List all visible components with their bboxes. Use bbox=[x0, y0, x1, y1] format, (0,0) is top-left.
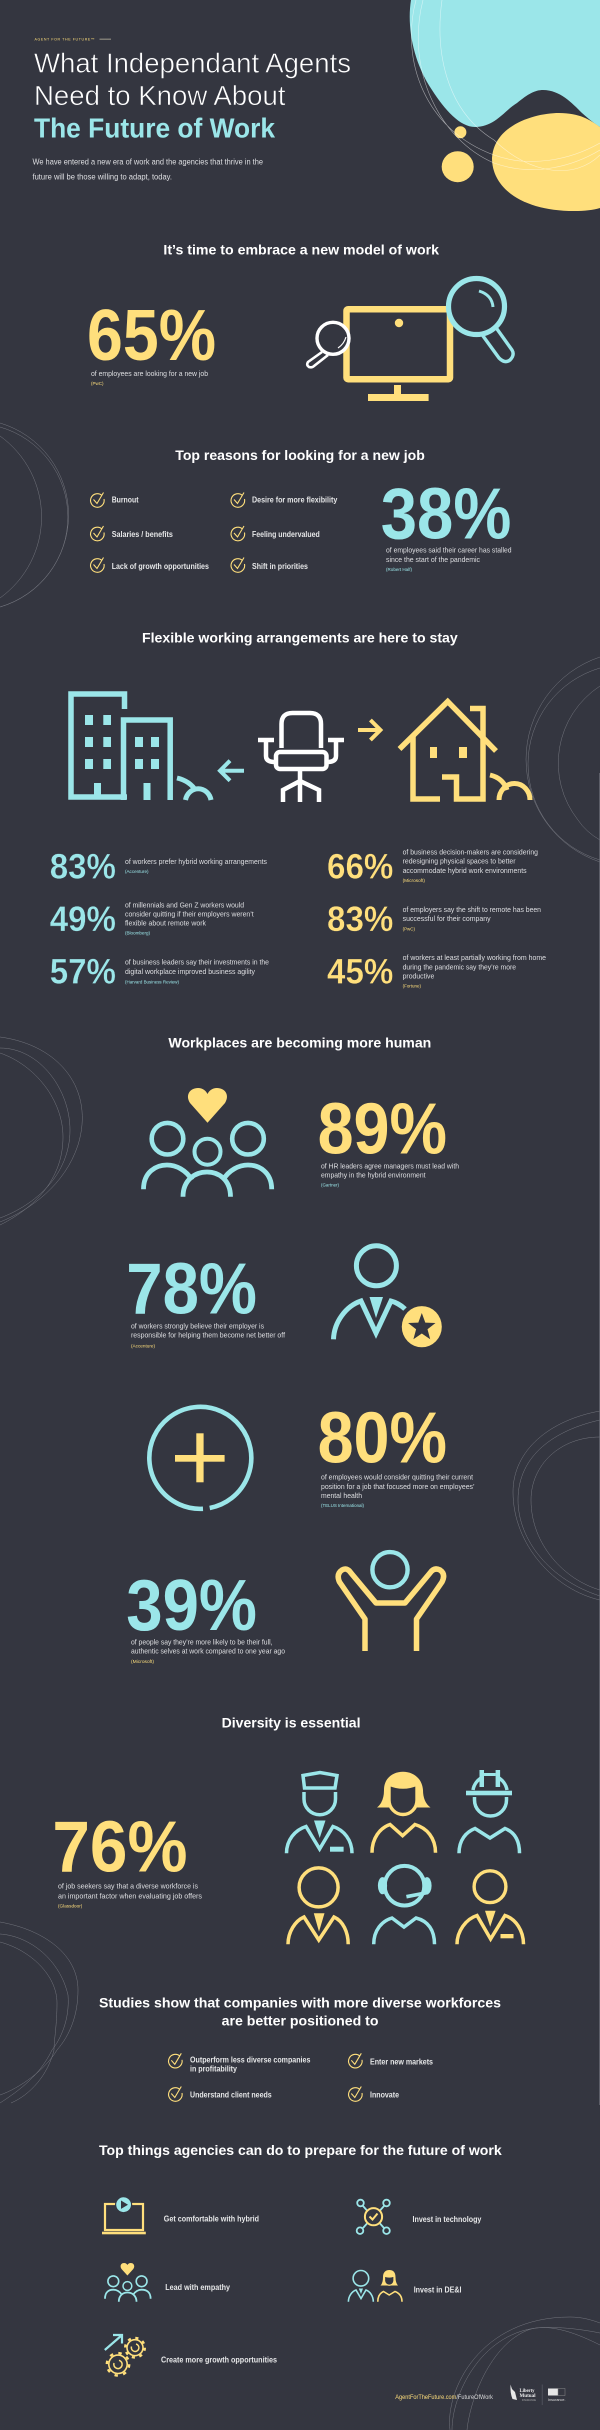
stat: 78%: 78% bbox=[126, 1249, 257, 1329]
stat: 89%: 89% bbox=[318, 1089, 447, 1169]
stat: 78%: responsible for helping them become net better off bbox=[131, 1331, 286, 1340]
decorative blobs bbox=[410, 0, 600, 211]
logo: Liberty Mutual: Mutual bbox=[520, 2394, 536, 2399]
stat: 49%: of millennials and Gen Z workers would bbox=[125, 900, 244, 909]
stat: 38%: since the start of the pandemic bbox=[386, 555, 480, 564]
stat: 45% bbox=[327, 952, 546, 991]
stat: 83% employers: successful for their company bbox=[403, 914, 491, 923]
checklist: diverse companies bbox=[169, 2053, 434, 2101]
reason: burnout bbox=[91, 492, 139, 507]
icon: monitor with magnifiers bbox=[307, 278, 513, 401]
reason: growth: Lack of growth opportunities bbox=[112, 562, 209, 571]
large magnifier bbox=[448, 278, 513, 362]
stats: hybrid work, right column bbox=[327, 847, 546, 991]
reason: undervalued bbox=[231, 526, 320, 541]
icon: headset agent bbox=[374, 1866, 434, 1944]
stat: 80%: 80% bbox=[318, 1399, 447, 1479]
icon: office buildings bbox=[71, 694, 211, 800]
stat: 83%: 83% bbox=[50, 847, 116, 886]
heading: diversity: Diversity is essential bbox=[222, 1715, 360, 1731]
stat: 39%: (Microsoft) bbox=[131, 1659, 154, 1664]
stat: 49%: consider quitting if their employers weren’t bbox=[125, 910, 254, 919]
icon: construction worker bbox=[459, 1770, 520, 1853]
stat: 38%: of employees said their career has stalled bbox=[386, 546, 512, 555]
action: hybrid bbox=[102, 2196, 259, 2234]
stat: 89%: (Gartner) bbox=[321, 1183, 339, 1188]
heading: new model of work: It’s time to embrace a new model of work bbox=[163, 242, 439, 258]
stat: 83% employers: 83% bbox=[327, 900, 393, 939]
reason: burnout: Burnout bbox=[112, 496, 139, 505]
monitor bbox=[346, 309, 450, 401]
stat: 76%: an important factor when evaluating job offers bbox=[58, 1891, 202, 1900]
stat: 65%: of employees are looking for a new job bbox=[91, 369, 208, 378]
action: empathy: Lead with empathy bbox=[165, 2283, 231, 2292]
stat: 83% employers bbox=[327, 900, 541, 939]
icon: woman bbox=[372, 1772, 436, 1853]
logo: Liberty Mutual: Liberty bbox=[520, 2389, 535, 2394]
stat: 76%: (Glassdoor) bbox=[58, 1904, 83, 1909]
stat: 49%: 49% bbox=[50, 900, 116, 939]
reason: growth bbox=[91, 558, 209, 572]
stat: 66%: of business decision-makers are considering bbox=[403, 848, 538, 857]
action: technology: Invest in technology bbox=[412, 2215, 482, 2224]
action: technology bbox=[357, 2200, 482, 2234]
stat: 45%: during the pandemic say they’re more bbox=[403, 962, 516, 971]
header bbox=[32, 37, 351, 181]
stat: 83% employers: (PwC) bbox=[403, 927, 415, 932]
stat: 89%: empathy in the hybrid environment bbox=[321, 1170, 426, 1179]
stats: hybrid work, left column bbox=[50, 847, 269, 991]
stat: 83%: (Accenture) bbox=[125, 869, 149, 874]
intro paragraph bbox=[32, 158, 263, 181]
icon: plus in circle bbox=[149, 1407, 251, 1509]
icon: team with heart small bbox=[105, 2263, 151, 2302]
title bbox=[34, 48, 351, 144]
icon: team with heart bbox=[144, 1088, 272, 1197]
title: What Independant Agents bbox=[34, 48, 351, 79]
stat: 57%: (Harvard Business Review) bbox=[125, 979, 179, 984]
reason: priorities: Shift in priorities bbox=[252, 562, 308, 571]
stat: 65%: (PwC) bbox=[91, 381, 104, 386]
icon: manager bbox=[457, 1871, 524, 1944]
icon: person with star bbox=[334, 1246, 442, 1347]
item: new markets: Enter new markets bbox=[370, 2058, 434, 2067]
stat: 38%: 38% bbox=[381, 474, 511, 554]
stat: 80%: (TELUS International) bbox=[321, 1503, 364, 1508]
stat: 66%: 66% bbox=[327, 847, 393, 886]
stat: 66%: (Microsoft) bbox=[403, 878, 425, 883]
icon: house bbox=[400, 702, 530, 800]
icon: office chair bbox=[258, 713, 344, 802]
heading: top things: Top things agencies can do to prepare for the future of work bbox=[99, 2142, 502, 2158]
icon: arrow and gears bbox=[105, 2335, 145, 2376]
icon: officer bbox=[286, 1772, 352, 1853]
item: outperform: Outperform less diverse companies bbox=[190, 2056, 311, 2065]
action: DE&I: Invest in DE&I bbox=[414, 2286, 462, 2295]
reason: salaries: Salaries / benefits bbox=[112, 530, 174, 539]
stat: 66%: redesigning physical spaces to better bbox=[403, 857, 516, 866]
item: innovate: Innovate bbox=[370, 2090, 400, 2099]
stat: 66%: accommodate hybrid work environments bbox=[403, 866, 527, 875]
stat: 49%: (Bloomberg) bbox=[125, 931, 150, 936]
stat: 76%: of job seekers say that a diverse workforce is bbox=[58, 1882, 198, 1891]
item: outperform bbox=[169, 2053, 311, 2074]
stat: 65%: 65% bbox=[87, 296, 216, 376]
stat: 39%: authentic selves at work compared to one year ago bbox=[131, 1647, 285, 1656]
stat: 80% bbox=[318, 1399, 475, 1508]
title: The Future of Work bbox=[34, 113, 275, 144]
small magnifier bbox=[307, 322, 349, 367]
reason: salaries bbox=[91, 526, 174, 541]
footer url: AgentForTheFuture.com/FutureOfWork bbox=[395, 2394, 494, 2401]
checklist: reasons bbox=[91, 492, 338, 572]
stat: 83% employers: of employers say the shift to remote has been bbox=[403, 905, 541, 914]
stat: 45%: 45% bbox=[327, 952, 393, 991]
intro paragraph: future will be those willing to adapt, today. bbox=[32, 172, 172, 181]
stat: 66% bbox=[327, 847, 538, 886]
action: growth: Create more growth opportunities bbox=[161, 2355, 278, 2364]
stat: 45%: (Fortune) bbox=[403, 984, 421, 989]
stat: 45%: of workers at least partially working from home bbox=[403, 953, 546, 962]
icon: laptop with play bbox=[102, 2196, 146, 2234]
action: empathy bbox=[105, 2263, 231, 2302]
stat: 83% bbox=[50, 847, 267, 886]
item: outperform: in profitability bbox=[190, 2065, 238, 2074]
stat: 39%: of people say they’re more likely to be their full, bbox=[131, 1638, 272, 1647]
icon: network bbox=[357, 2200, 390, 2234]
logo: Liberty Mutual: INSURANCE bbox=[522, 2399, 536, 2402]
heading: more human: Workplaces are becoming more human bbox=[168, 1034, 431, 1050]
arrow: to home bbox=[358, 720, 380, 740]
stat: 76%: 76% bbox=[52, 1808, 188, 1888]
stat: 49% bbox=[50, 900, 254, 939]
heading: flexible working: Flexible working arrangements are here to stay bbox=[142, 629, 458, 645]
intro paragraph: We have entered a new era of work and the agencies that thrive in the bbox=[32, 158, 263, 167]
reason: priorities bbox=[231, 558, 308, 572]
stat: 38%: (Robert Half) bbox=[386, 567, 412, 572]
heading: studies show: are better positioned to bbox=[222, 2012, 378, 2028]
item: new markets bbox=[349, 2053, 434, 2068]
action: hybrid: Get comfortable with hybrid bbox=[164, 2215, 259, 2224]
eyebrow label: AGENT FOR THE FUTURE™ bbox=[34, 37, 94, 41]
heading: top reasons: Top reasons for looking for a new job bbox=[175, 447, 425, 463]
stat: 80%: of employees would consider quitting their current bbox=[321, 1473, 473, 1482]
logos bbox=[510, 2384, 566, 2405]
illustration: office, chair, home bbox=[71, 694, 530, 802]
stat: 83%: of workers prefer hybrid working arrangements bbox=[125, 857, 267, 866]
heading: studies show: Studies show that companies with more diverse workforces bbox=[99, 1995, 501, 2011]
title: Need to Know About bbox=[34, 80, 286, 111]
action: DE&I bbox=[348, 2270, 462, 2302]
logo: Liberty Mutual bbox=[510, 2384, 536, 2402]
icons: diverse workforce bbox=[286, 1770, 524, 1944]
stat: 89%: of HR leaders agree managers must lead with bbox=[321, 1161, 459, 1170]
stat: 49%: flexible about remote work bbox=[125, 919, 206, 928]
icon: businessman bbox=[288, 1868, 348, 1944]
logo: Safeco: Insurance. bbox=[548, 2397, 566, 2402]
reason: flexibility bbox=[231, 492, 338, 507]
icon: person arms raised bbox=[338, 1552, 444, 1651]
item: client needs: Understand client needs bbox=[190, 2090, 272, 2099]
stat: 57%: 57% bbox=[50, 952, 116, 991]
reason: flexibility: Desire for more flexibility bbox=[252, 496, 338, 505]
reason: undervalued: Feeling undervalued bbox=[252, 530, 320, 539]
arrow: to office bbox=[220, 761, 244, 781]
item: client needs bbox=[169, 2086, 272, 2101]
item: innovate bbox=[349, 2086, 400, 2101]
stat: 57%: digital workplace improved business agility bbox=[125, 967, 255, 976]
stat: 45%: productive bbox=[403, 972, 434, 981]
stat: 57%: of business leaders say their investments in the bbox=[125, 958, 269, 967]
heading: studies show bbox=[99, 1995, 501, 2028]
stat: 78%: of workers strongly believe their employer is bbox=[131, 1322, 264, 1331]
stat: 57% bbox=[50, 952, 269, 991]
stat: 78%: (Accenture) bbox=[131, 1343, 155, 1348]
stat: 80%: position for a job that focused more on employees’ bbox=[321, 1482, 475, 1491]
stat: 80%: mental health bbox=[321, 1491, 362, 1500]
icon: two people bbox=[348, 2270, 402, 2302]
action: growth bbox=[105, 2335, 278, 2376]
stat: 39%: 39% bbox=[126, 1566, 257, 1646]
